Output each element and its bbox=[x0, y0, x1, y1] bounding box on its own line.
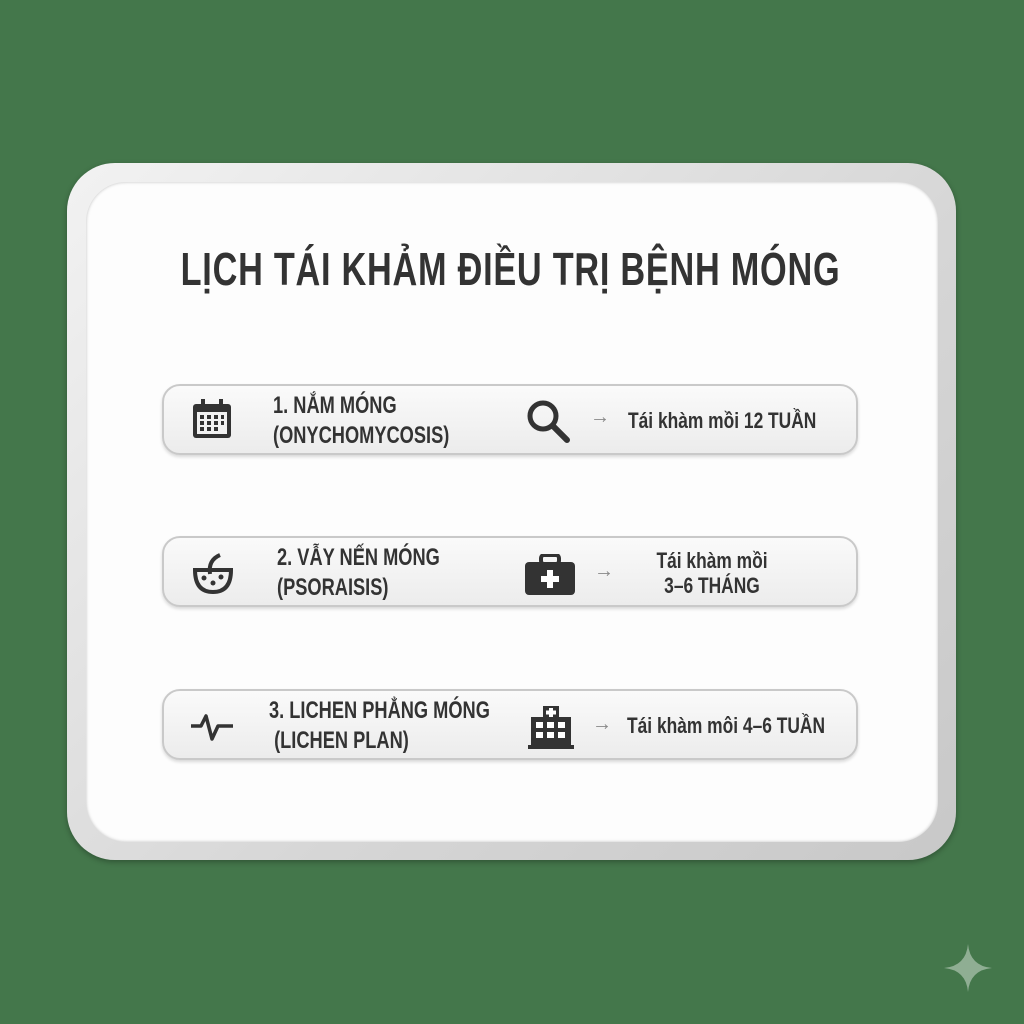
card frame bbox=[67, 163, 956, 860]
interval: Tái khàm môi 4–6 TUẦN bbox=[627, 713, 825, 738]
interval: 3–6 THÁNG bbox=[664, 573, 760, 598]
label: 2. VẪY NẾN MÓNG bbox=[277, 544, 440, 571]
label: 3. LICHEN PHẲNG MÓNG bbox=[269, 697, 490, 724]
icon: medical kit bbox=[525, 554, 575, 595]
icon: magnifier bbox=[528, 400, 570, 443]
icon: sparkle bbox=[944, 944, 992, 992]
label: (ONYCHOMYCOSIS) bbox=[273, 422, 449, 449]
title: LỊCH TÁI KHẢM ĐIỀU TRỊ BỆNH MÓNG bbox=[181, 243, 840, 295]
row 2: psoriasis bbox=[162, 536, 858, 607]
interval bbox=[656, 548, 768, 598]
card inner panel bbox=[86, 182, 938, 842]
label: 1. NẮM MÓNG bbox=[273, 392, 397, 419]
label: (LICHEN PLAN) bbox=[274, 727, 409, 754]
arrow: → bbox=[590, 406, 610, 428]
label bbox=[273, 391, 449, 449]
icon: pulse bbox=[191, 714, 233, 741]
icon: hospital bbox=[528, 706, 574, 749]
row 1: onychomycosis bbox=[162, 384, 858, 455]
row 3: lichen planus bbox=[162, 689, 858, 760]
icon: skin bbox=[193, 553, 233, 594]
icon: calendar bbox=[193, 399, 231, 438]
interval: Tái khàm mồi 12 TUẦN bbox=[628, 408, 816, 433]
label bbox=[277, 543, 440, 601]
label bbox=[269, 696, 490, 754]
label: (PSORAISIS) bbox=[277, 574, 388, 601]
arrow: → bbox=[594, 560, 614, 582]
interval: Tái khàm mồi bbox=[656, 548, 768, 573]
arrow: → bbox=[592, 713, 612, 735]
